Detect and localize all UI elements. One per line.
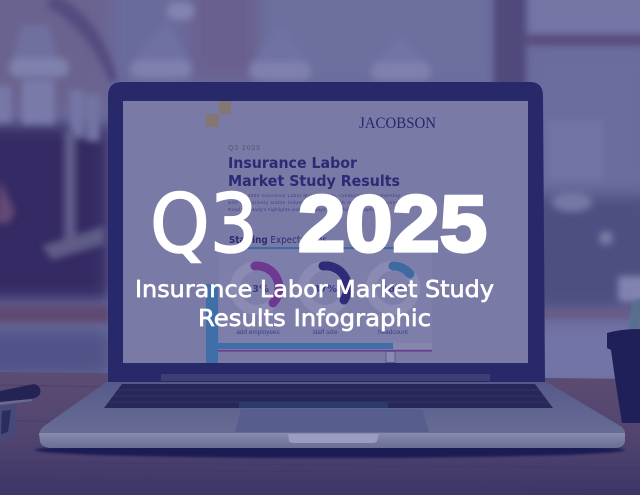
screen: intro text: with a relatively stable industry, measures job market expectations. — [228, 200, 400, 205]
screen: blue connector — [206, 284, 432, 363]
screen: logo squares — [206, 101, 231, 127]
ring: staff size: 37% — [313, 284, 337, 295]
blurred cafe background — [0, 0, 640, 385]
screen: intro text: Read the study's highlights and takeaways in this full infographic. — [228, 207, 378, 212]
laptop shadow — [35, 442, 625, 458]
screen: title: Market Study Results — [228, 172, 400, 190]
screen: title: Insurance Labor — [228, 154, 358, 172]
ring: headcount: 16% — [381, 284, 405, 295]
icon: plant pot — [607, 298, 640, 423]
laptop — [39, 82, 625, 448]
screen: stat card — [219, 250, 432, 343]
heading: Q3 2025 — [150, 178, 487, 272]
wooden desk — [0, 372, 640, 495]
ring: add employees — [235, 266, 279, 310]
thumb notch — [288, 434, 379, 443]
subtitle: Insurance Labor Market Study — [135, 277, 494, 303]
ring captions: headcount — [378, 329, 408, 336]
ring: staff size — [303, 266, 348, 310]
laptop lid — [108, 82, 545, 382]
keyboard — [104, 384, 553, 408]
ring captions — [236, 329, 408, 336]
subtitle: Results Infographic — [198, 306, 431, 332]
heading: Q3 2025: 2025 — [298, 179, 487, 268]
screen: section rule — [219, 247, 400, 249]
front lip — [39, 433, 625, 448]
screen: small box — [386, 352, 395, 362]
icon: pen and clip — [0, 384, 40, 441]
screen: title — [228, 154, 400, 190]
hinge — [161, 374, 490, 381]
screen: Jacobson logo: JACOBSON — [359, 115, 436, 132]
laptop base — [39, 381, 625, 448]
heading: Q3 2025: Q3 — [150, 178, 258, 272]
subtitle — [135, 277, 494, 332]
ring: add employees: 33% — [245, 284, 269, 295]
screen: intro text — [228, 193, 400, 212]
screen: section heading: Staffing Expectations — [229, 235, 327, 246]
ring captions: add employees — [236, 329, 280, 336]
ring: headcount — [371, 266, 415, 310]
screen: quarter label: Q3 2025 — [228, 145, 260, 152]
screen: intro text: The Q3 2025 Insurance Labor Market Study, conducted in partnership — [228, 193, 400, 198]
ring captions: staff size — [312, 329, 338, 336]
laptop screen — [123, 101, 528, 363]
trackpad — [235, 409, 429, 432]
